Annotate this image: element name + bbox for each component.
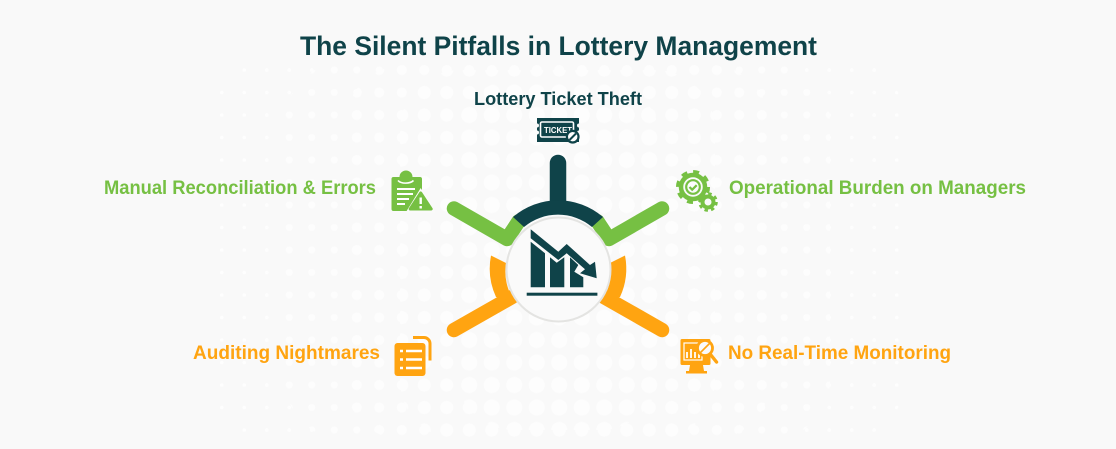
hub connectors <box>454 163 662 330</box>
icon: monitor with magnifier <box>680 339 716 374</box>
icon: declining bar chart <box>527 229 597 296</box>
label: Manual Reconciliation & Errors: Manual Reconciliation & Errors <box>104 178 376 199</box>
connector: dark arc <box>513 200 603 227</box>
connector: top dark stem <box>550 163 566 205</box>
icon: ticket <box>537 118 579 142</box>
title: The Silent Pitfalls in Lottery Management <box>300 31 817 61</box>
icon: gears <box>678 172 716 210</box>
connector: lower-left orange arm <box>454 256 515 330</box>
connector: lower-right orange arm <box>601 256 662 330</box>
label: Auditing Nightmares: Auditing Nightmares <box>193 343 380 364</box>
label: Operational Burden on Managers: Operational Burden on Managers <box>729 178 1026 199</box>
icon: document list <box>394 338 430 376</box>
icon: ticket: TICKET <box>544 125 573 135</box>
connector: upper-left green arm <box>454 208 518 239</box>
connector: upper-right green arm <box>598 208 662 239</box>
label: No Real-Time Monitoring: No Real-Time Monitoring <box>728 343 951 364</box>
label: Lottery Ticket Theft: Lottery Ticket Theft <box>474 88 642 109</box>
icon: clipboard with warning <box>392 170 436 212</box>
center circle <box>506 218 610 322</box>
